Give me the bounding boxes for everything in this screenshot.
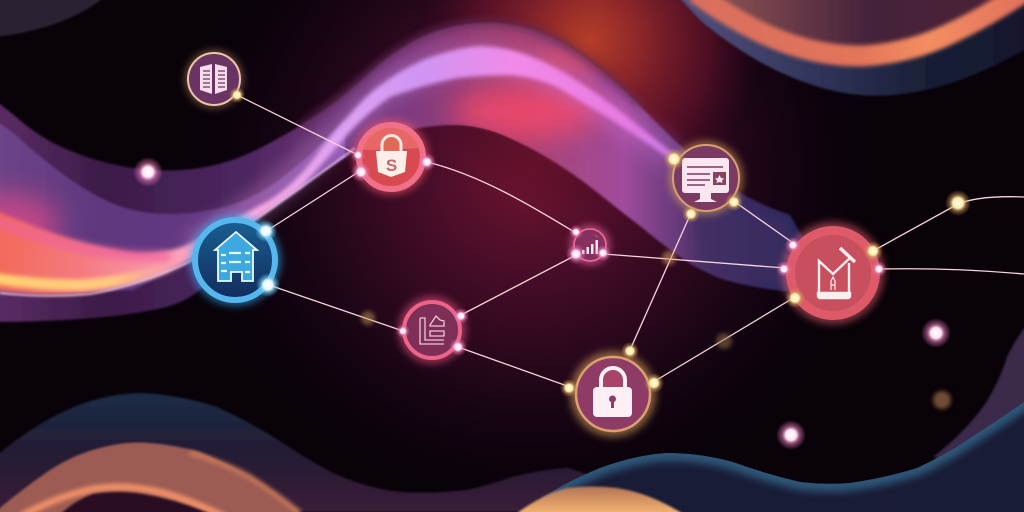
ambient light: crossing glow <box>662 251 676 265</box>
ambient light: lower-right pink dot <box>921 318 951 348</box>
wave: band tail behind monitor <box>690 200 800 285</box>
icon: open book <box>200 64 227 94</box>
wave: blue crest highlight <box>541 402 1024 500</box>
node: document <box>398 296 466 364</box>
wave: inner glow layers <box>0 46 615 296</box>
wave: bottom-left orange highlight <box>20 487 225 512</box>
node: chart <box>570 225 610 265</box>
wave: bottom-left <box>0 393 640 512</box>
node: home <box>189 214 281 306</box>
wave: pale lower strand <box>0 148 355 296</box>
node: padlock <box>570 351 656 437</box>
wave: soft blurred top edge <box>300 23 640 127</box>
wave: top-left corner <box>0 0 107 37</box>
wave: yellow ribbon core <box>0 262 185 285</box>
icon: star badge <box>715 175 724 183</box>
ambient light: line end dot <box>945 190 971 216</box>
wave: bright ribbon <box>0 46 675 296</box>
ambient light: amber dim dot <box>933 391 951 409</box>
icon: padlock with letter S: S <box>386 156 397 175</box>
icon: padlock <box>593 368 632 417</box>
wave: ribbon soft halo <box>190 60 675 250</box>
node: shopping lock <box>353 119 429 195</box>
icon: house <box>215 232 257 281</box>
node: book <box>185 50 243 108</box>
wave: pink upper edge <box>0 215 170 256</box>
wave: main translucent band <box>0 23 810 322</box>
icon: tablet with arrow <box>818 248 855 298</box>
ambient light: left pink dot <box>133 157 163 187</box>
wave: orange mound <box>512 486 688 512</box>
wave: top-right orange arc <box>695 0 1024 56</box>
wave: bottom-right <box>512 398 1024 512</box>
icon: rising bars <box>582 234 600 254</box>
connector lines <box>237 95 1024 387</box>
wave: right edge outer <box>933 320 1024 480</box>
ambient light: amber dot on line <box>716 333 732 349</box>
connector end dots <box>229 87 887 397</box>
node: tablet hub <box>782 222 884 324</box>
ambient light: amber dot near document node <box>361 311 375 325</box>
wave: top-right <box>677 0 1024 96</box>
highlight: inner sheen <box>362 127 420 150</box>
icon: desktop monitor <box>682 158 729 202</box>
ambient light: bottom pink dot <box>776 420 806 450</box>
node: monitor <box>669 141 743 215</box>
icon: outline blueprint <box>420 316 444 344</box>
